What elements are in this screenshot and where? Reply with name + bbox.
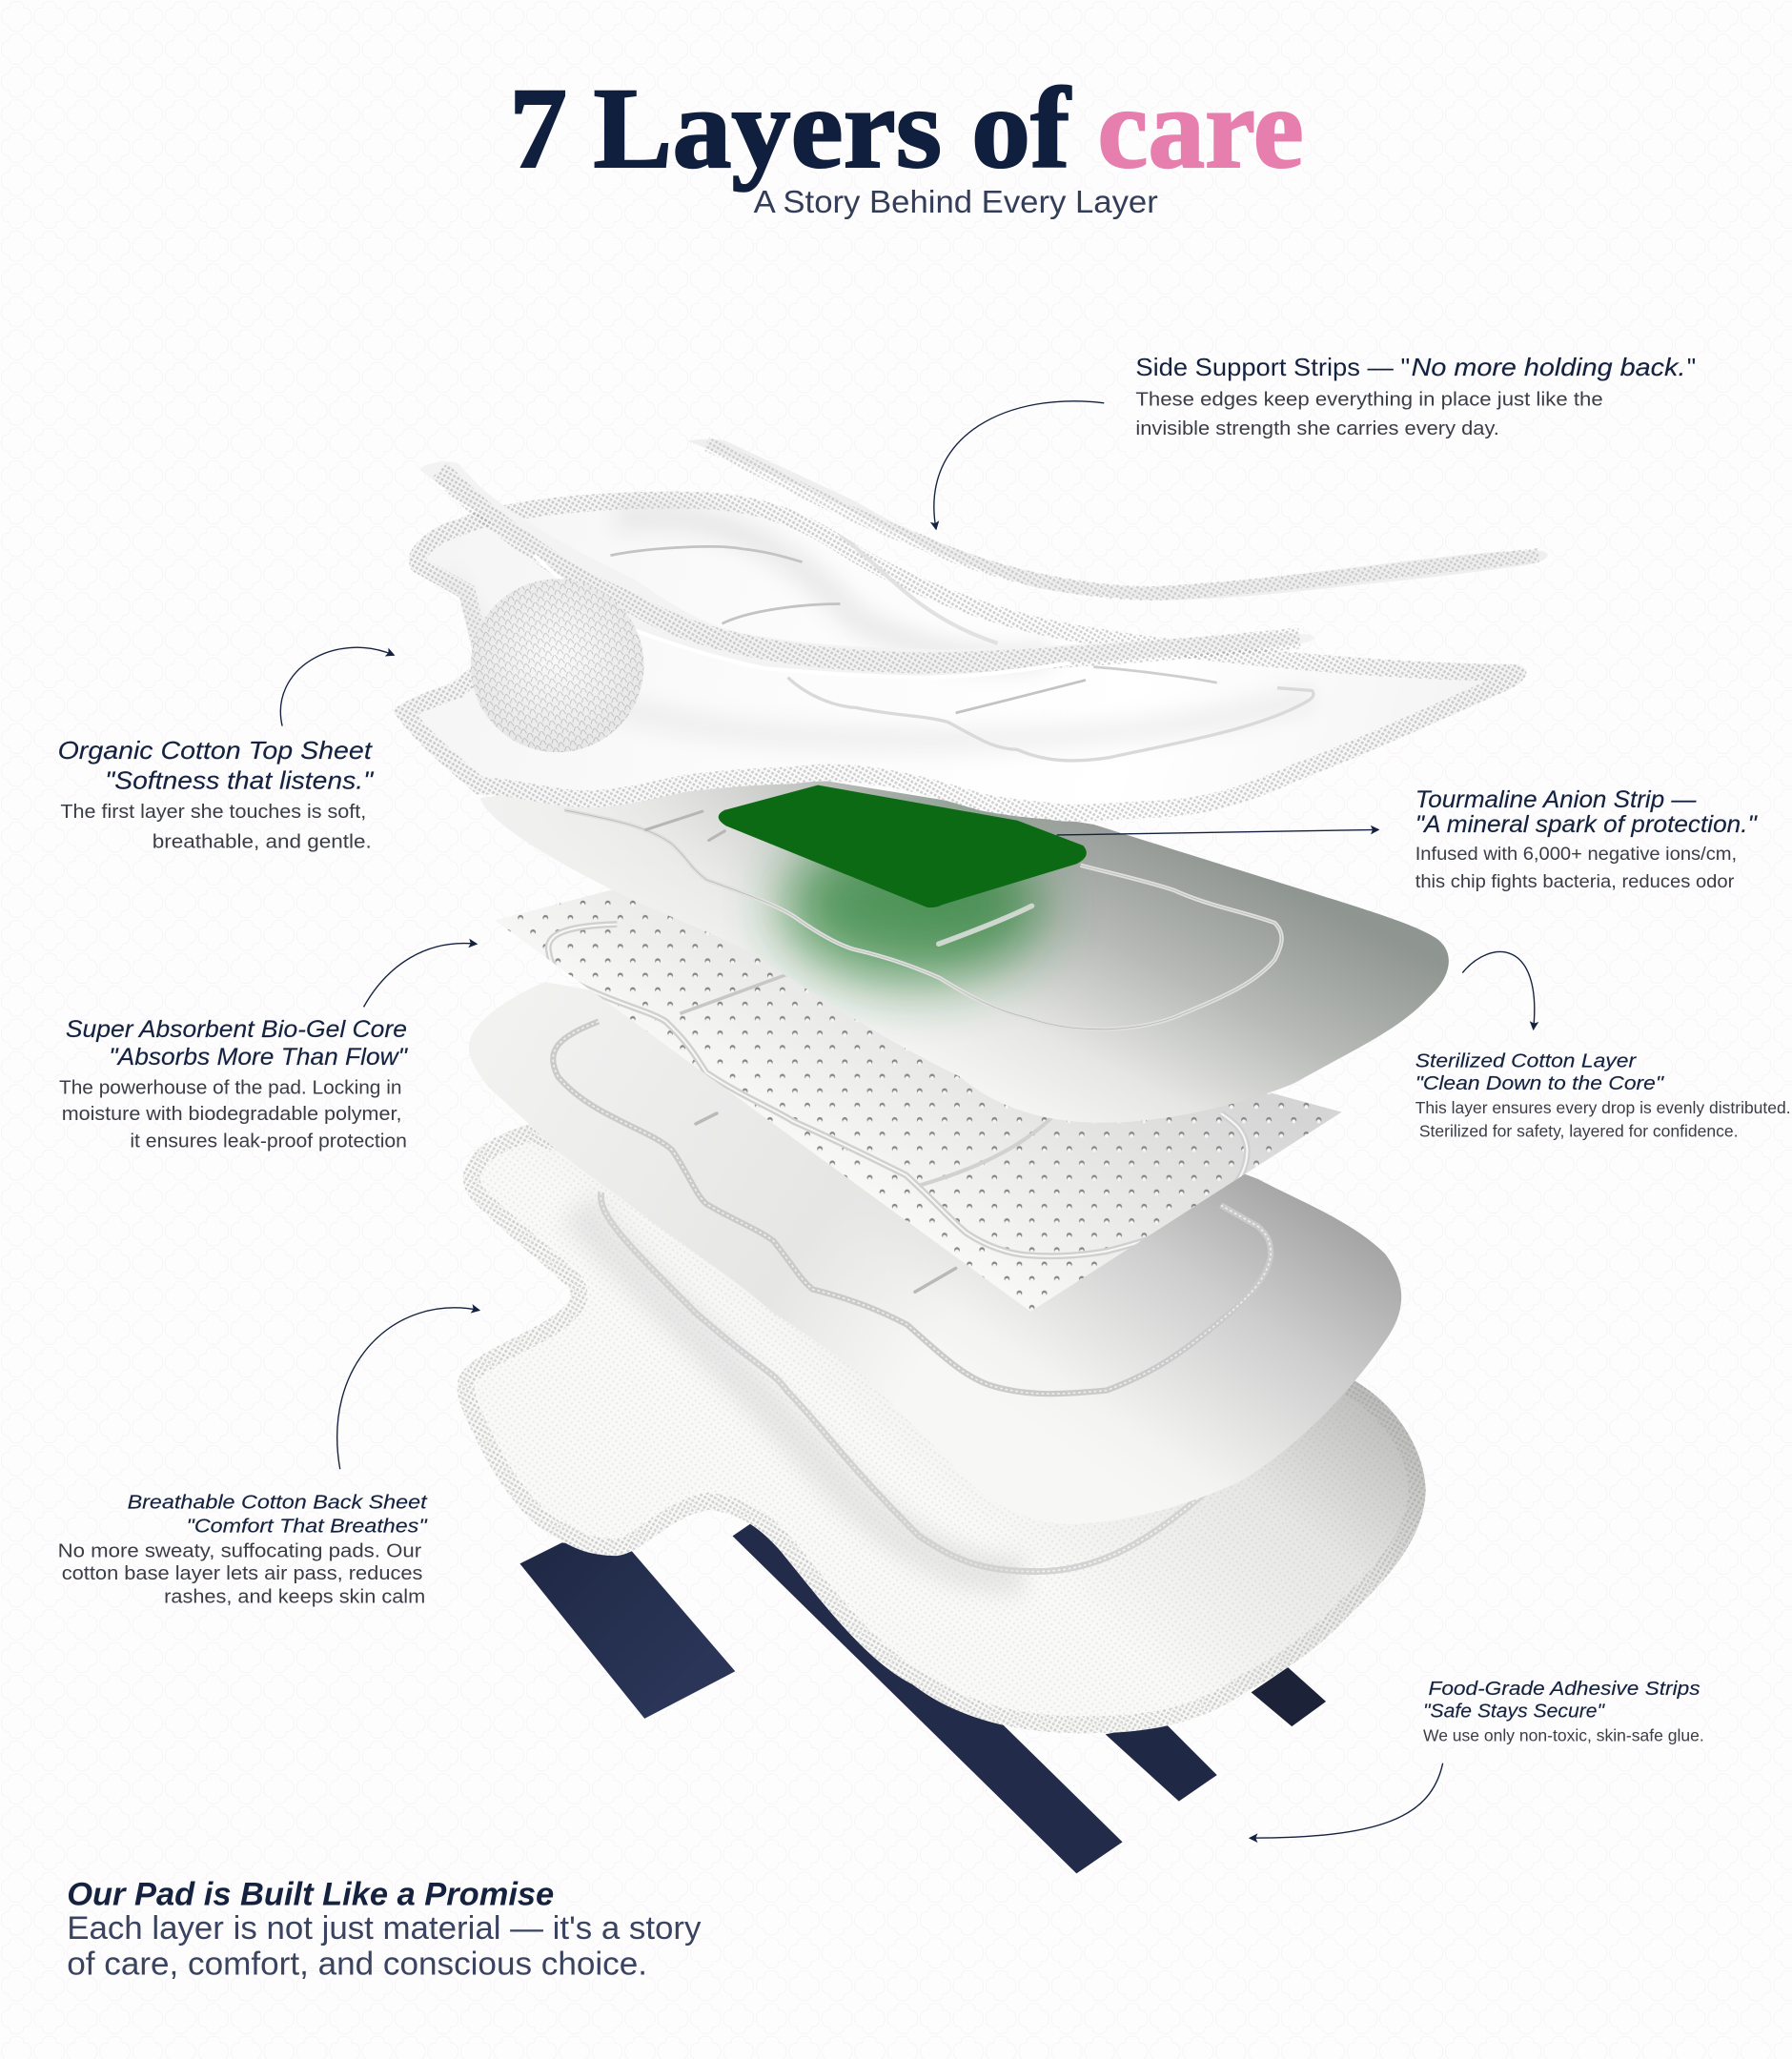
arrow: sterilized cotton layer <box>1462 952 1535 1030</box>
title: care <box>1097 65 1304 193</box>
callout: side support strips: " <box>1687 353 1696 381</box>
callout: side support strips <box>1135 353 1696 439</box>
subtitle: A Story Behind Every Layer <box>754 185 1158 220</box>
callout: sterilized cotton layer: "Clean Down to the Core" <box>1415 1072 1665 1094</box>
icon: green tourmaline chip <box>719 785 1087 907</box>
callout: breathable cotton back sheet: Breathable Cotton Back Sheet <box>128 1492 428 1514</box>
callout: side support strips: These edges keep everything in place just like the <box>1135 389 1603 411</box>
callout: tourmaline anion strip: this chip fights bacteria, reduces odor <box>1415 872 1735 892</box>
arrow: food-grade adhesive strips <box>1250 1763 1443 1838</box>
callout: super absorbent bio-gel core: "Absorbs More Than Flow" <box>109 1045 408 1070</box>
callout: sterilized cotton layer <box>1415 1050 1791 1141</box>
icon: green glow <box>781 829 1044 982</box>
adhesive strips <box>519 1504 1326 1873</box>
layer: sterilized cotton <box>469 982 1401 1524</box>
title: Layers of <box>594 65 1071 193</box>
title: 7 <box>509 65 567 193</box>
callout: food-grade adhesive strips <box>1423 1678 1704 1744</box>
arrow: organic cotton top sheet <box>280 647 394 726</box>
callout: super absorbent bio-gel core <box>59 1017 408 1152</box>
callout: super absorbent bio-gel core: it ensures leak-proof protection <box>130 1131 407 1152</box>
callout: tourmaline anion strip: Infused with 6,000+ negative ions/cm, <box>1415 845 1737 865</box>
title <box>509 65 1304 193</box>
side support strip: right <box>688 439 1548 601</box>
callout: sterilized cotton layer: Sterilized for safety, layered for confidence. <box>1419 1122 1739 1141</box>
layer: breathable cotton back sheet <box>458 1124 1426 1733</box>
callout: super absorbent bio-gel core: The powerhouse of the pad. Locking in <box>59 1076 401 1098</box>
callout: organic cotton top sheet <box>58 736 375 853</box>
callout: organic cotton top sheet: breathable, and gentle. <box>153 831 372 853</box>
closing statement: Each layer is not just material — it's a story <box>67 1910 702 1947</box>
callout: side support strips: invisible strength she carries every day. <box>1135 418 1499 439</box>
callout: organic cotton top sheet: Organic Cotton Top Sheet <box>58 736 374 764</box>
callout: super absorbent bio-gel core: moisture with biodegradable polymer, <box>62 1103 401 1125</box>
inner emboss seams <box>610 535 1313 761</box>
callout: breathable cotton back sheet: rashes, and keeps skin calm <box>164 1586 425 1608</box>
layer: organic cotton top sheet <box>393 492 1526 822</box>
callout: breathable cotton back sheet: No more sweaty, suffocating pads. Our <box>58 1539 421 1561</box>
magnified texture circle <box>471 579 644 752</box>
callout: sterilized cotton layer: This layer ensures every drop is evenly distributed. <box>1415 1098 1791 1117</box>
callout: breathable cotton back sheet <box>58 1492 428 1608</box>
side support strip: left <box>420 461 1314 678</box>
arrow: super absorbent core <box>364 944 477 1007</box>
callout: tourmaline anion strip <box>1415 787 1758 892</box>
callout: food-grade adhesive strips: We use only non-toxic, skin-safe glue. <box>1423 1725 1704 1744</box>
callout: sterilized cotton layer: Sterilized Cotton Layer <box>1415 1050 1637 1072</box>
callout: organic cotton top sheet: "Softness that listens." <box>105 766 375 795</box>
callout: side support strips: No more holding back. <box>1412 353 1685 381</box>
callout: breathable cotton back sheet: cotton base layer lets air pass, reduces <box>62 1562 422 1584</box>
callout: tourmaline anion strip: Tourmaline Anion Strip — <box>1415 787 1697 813</box>
callout: super absorbent bio-gel core: Super Absorbent Bio-Gel Core <box>66 1017 407 1043</box>
layer: tourmaline base <box>480 775 1449 1123</box>
callout: side support strips: Side Support Strips — " <box>1135 353 1410 381</box>
callout: food-grade adhesive strips: "Safe Stays Secure" <box>1423 1700 1606 1722</box>
callout: breathable cotton back sheet: "Comfort That Breathes" <box>187 1515 428 1537</box>
callout: food-grade adhesive strips: Food-Grade Adhesive Strips <box>1428 1678 1700 1700</box>
closing statement <box>67 1876 702 1982</box>
callout: tourmaline anion strip: "A mineral spark of protection." <box>1415 812 1758 838</box>
closing statement: of care, comfort, and conscious choice. <box>67 1946 647 1982</box>
arrow: breathable cotton back sheet <box>337 1308 479 1469</box>
callout: organic cotton top sheet: The first layer she touches is soft, <box>60 801 366 823</box>
arrow: side support strips <box>934 401 1104 529</box>
arrow: tourmaline anion strip <box>1057 829 1378 835</box>
closing statement: Our Pad is Built Like a Promise <box>67 1876 554 1912</box>
layer: perforated absorbent bio-gel core <box>495 888 1342 1312</box>
